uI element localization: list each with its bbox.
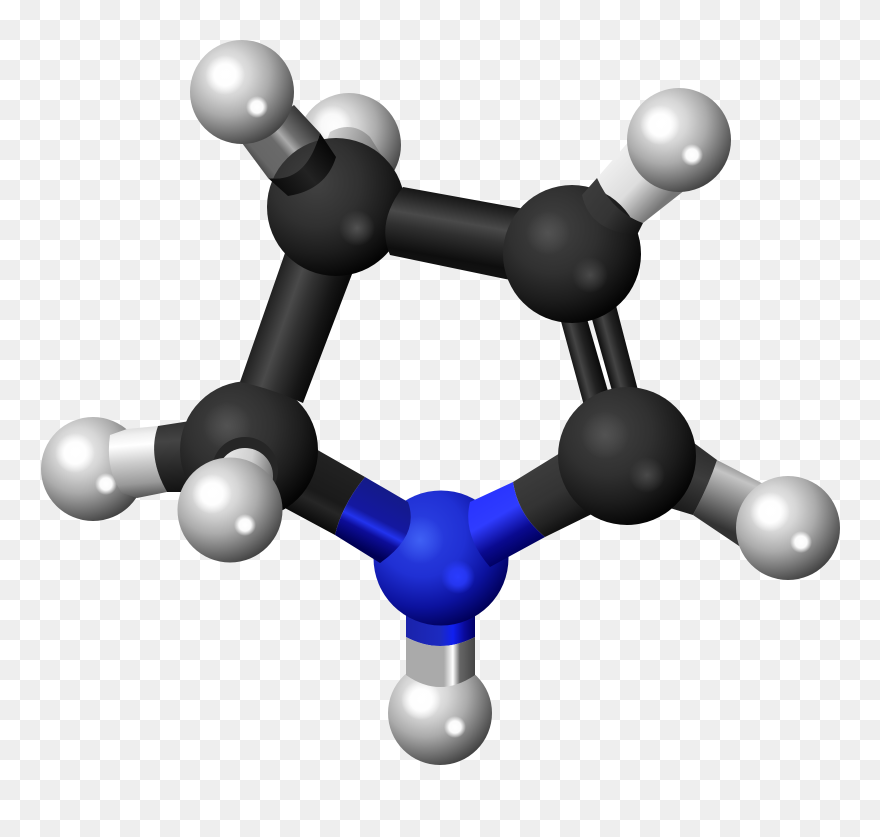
atom: left hydrogen [41, 417, 145, 521]
bond: right carbon to hydrogen, dark half [660, 440, 717, 515]
bond: double bond between right carbons [556, 290, 640, 413]
atom: front hydrogen [178, 458, 282, 562]
bond: right carbon to nitrogen, blue half [468, 482, 545, 567]
bond: front hydrogen stick on lower-left carbon [212, 437, 278, 504]
bond: top-left hydrogen stick [242, 105, 320, 179]
atom: top-left carbon [267, 138, 405, 276]
atom: rear hydrogen behind top-left carbon [297, 93, 401, 197]
bond: nitrogen to bottom hydrogen [406, 605, 475, 687]
bond: left hydrogen stick [109, 421, 190, 498]
atom: lower-right carbon [558, 387, 696, 525]
atom: right hydrogen [736, 476, 840, 580]
atom: bottom hydrogen [388, 661, 492, 765]
bond: top-right hydrogen stick, dark half [582, 178, 643, 235]
atom: lower-left carbon [180, 381, 318, 519]
bond: right hydrogen stick [693, 460, 775, 550]
bond: top carbon to carbon [385, 187, 530, 282]
bond: left carbon to top-left carbon [240, 210, 365, 403]
bond: top-left hydrogen stick, dark band [268, 133, 336, 196]
bond: right carbon to nitrogen, dark half [513, 450, 600, 537]
atom: top-right carbon [503, 185, 641, 323]
atom: nitrogen [374, 490, 508, 626]
bond: left carbon to nitrogen, dark half [270, 440, 365, 535]
atom: top-right hydrogen [627, 88, 731, 192]
atom: top-left hydrogen [190, 40, 294, 144]
bond: top-right hydrogen stick [597, 140, 685, 223]
bond: left carbon to nitrogen, blue half [335, 477, 411, 563]
